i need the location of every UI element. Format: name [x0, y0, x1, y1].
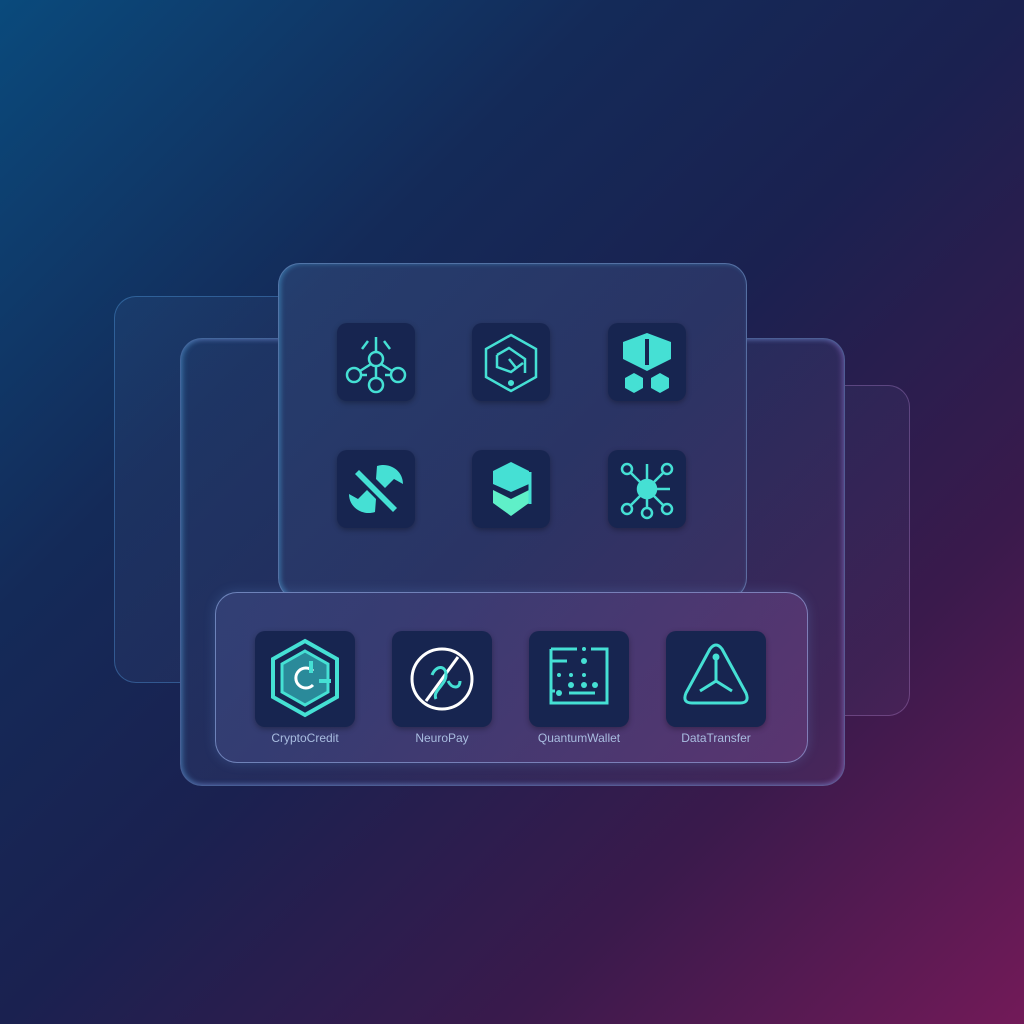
app: QuantumWallet: QuantumWallet: [538, 731, 620, 745]
icon: cube blocks: [608, 323, 686, 401]
app: NeuroPay: NeuroPay: [415, 731, 469, 745]
icon: hex cube: [472, 450, 550, 528]
panel: back left: [114, 296, 504, 683]
icon: hub nodes: [608, 450, 686, 528]
app: QuantumWallet: [527, 631, 631, 745]
app: CryptoCredit: CryptoCredit: [271, 731, 339, 745]
app: DataTransfer: DataTransfer: [681, 731, 751, 745]
icon: hex link: [472, 323, 550, 401]
app: NeuroPay: [390, 631, 494, 745]
icon: crossed tool: [337, 450, 415, 528]
panel: dock: [215, 592, 808, 763]
panel: middle: [180, 338, 845, 786]
app: DataTransfer: [664, 631, 768, 745]
icon: network tree: [337, 323, 415, 401]
panel: main icon grid: [278, 263, 747, 600]
panel: back right: [540, 385, 910, 716]
app: CryptoCredit: [253, 631, 357, 745]
